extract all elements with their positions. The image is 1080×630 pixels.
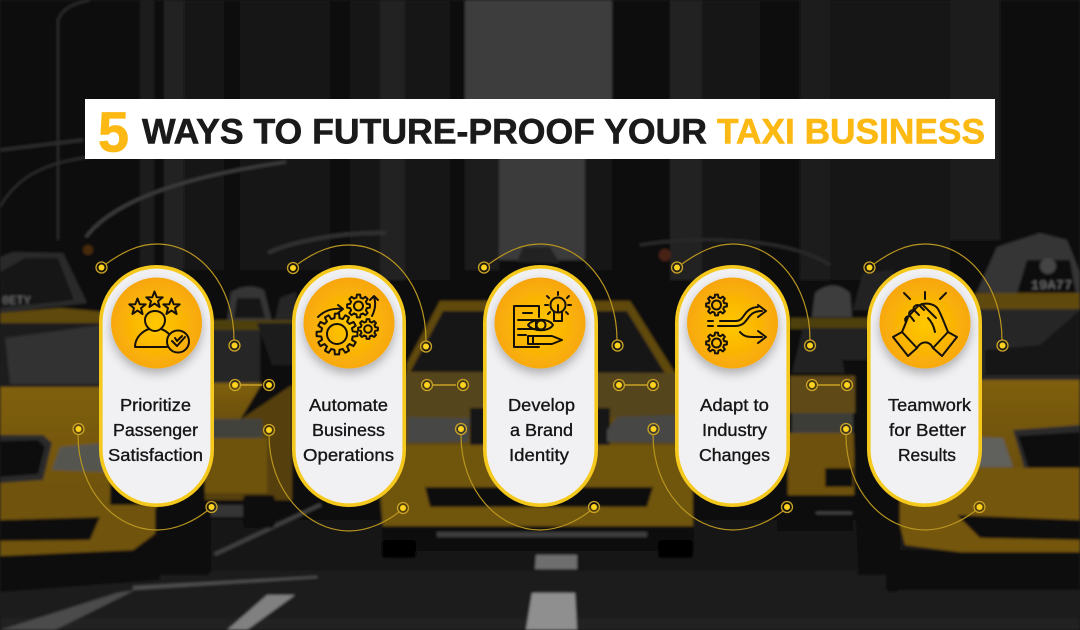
title number 5: 5 (98, 100, 129, 164)
buildings and sky (0, 0, 1080, 280)
right taxi (853, 233, 1080, 592)
label: step 2: Business (312, 420, 385, 440)
icon: clasped hands (893, 292, 957, 356)
icon: gears with arrows (317, 295, 378, 354)
label: step 4 (699, 395, 770, 465)
label: step 1: Prioritize (120, 395, 191, 415)
title text yellow: TAXI BUSINESS (717, 112, 985, 152)
icon: gears and diverging arrows (706, 295, 766, 353)
label: step 4: Changes (699, 445, 770, 465)
label: step 2: Operations (303, 445, 394, 465)
label: step 5: Results (898, 445, 956, 465)
label: step 5: for Better (889, 420, 966, 440)
label: step 1: Satisfaction (108, 445, 203, 465)
right taxi: 19A77 (1031, 278, 1072, 293)
title banner (85, 99, 995, 164)
left taxi (0, 252, 211, 592)
label: step 5 (888, 395, 971, 465)
center taxi (380, 247, 694, 558)
panel: step 3 develop a brand identity (485, 267, 596, 505)
label: step 5: Teamwork (888, 395, 971, 415)
panel: step 1 prioritize passenger satisfaction (101, 267, 212, 505)
panel: step 5 teamwork for better results (869, 267, 980, 505)
arcs for step 2 (264, 245, 468, 531)
second taxi behind left (205, 286, 296, 528)
arcs for step 3 (456, 244, 658, 530)
panel: step 2 automate business operations (294, 267, 404, 505)
left taxi: 0ETY (2, 294, 31, 308)
icon: document, eye, pencil and bulb (514, 292, 571, 347)
road (0, 520, 1080, 630)
label: step 3 (508, 395, 575, 465)
arcs for step 4 (648, 244, 852, 530)
label: step 4: Adapt to (700, 395, 769, 415)
arcs for step 5 (840, 244, 1008, 530)
label: step 3: Identity (509, 445, 569, 465)
panel: step 4 adapt to industry changes (677, 267, 788, 505)
label: step 1: Passenger (113, 420, 198, 440)
title text black: WAYS TO FUTURE-PROOF YOUR (142, 112, 707, 152)
label: step 4: Industry (702, 420, 767, 440)
icon: person with stars and check (129, 292, 189, 352)
label: step 2 (303, 395, 394, 465)
label: step 1 (108, 395, 203, 465)
arcs for step 1 (73, 244, 274, 530)
label: step 3: Develop (508, 395, 575, 415)
label: step 2: Automate (309, 395, 388, 415)
second taxi behind right (755, 270, 893, 531)
connector arcs and dots (73, 244, 1008, 531)
label: step 3: a Brand (510, 420, 573, 440)
